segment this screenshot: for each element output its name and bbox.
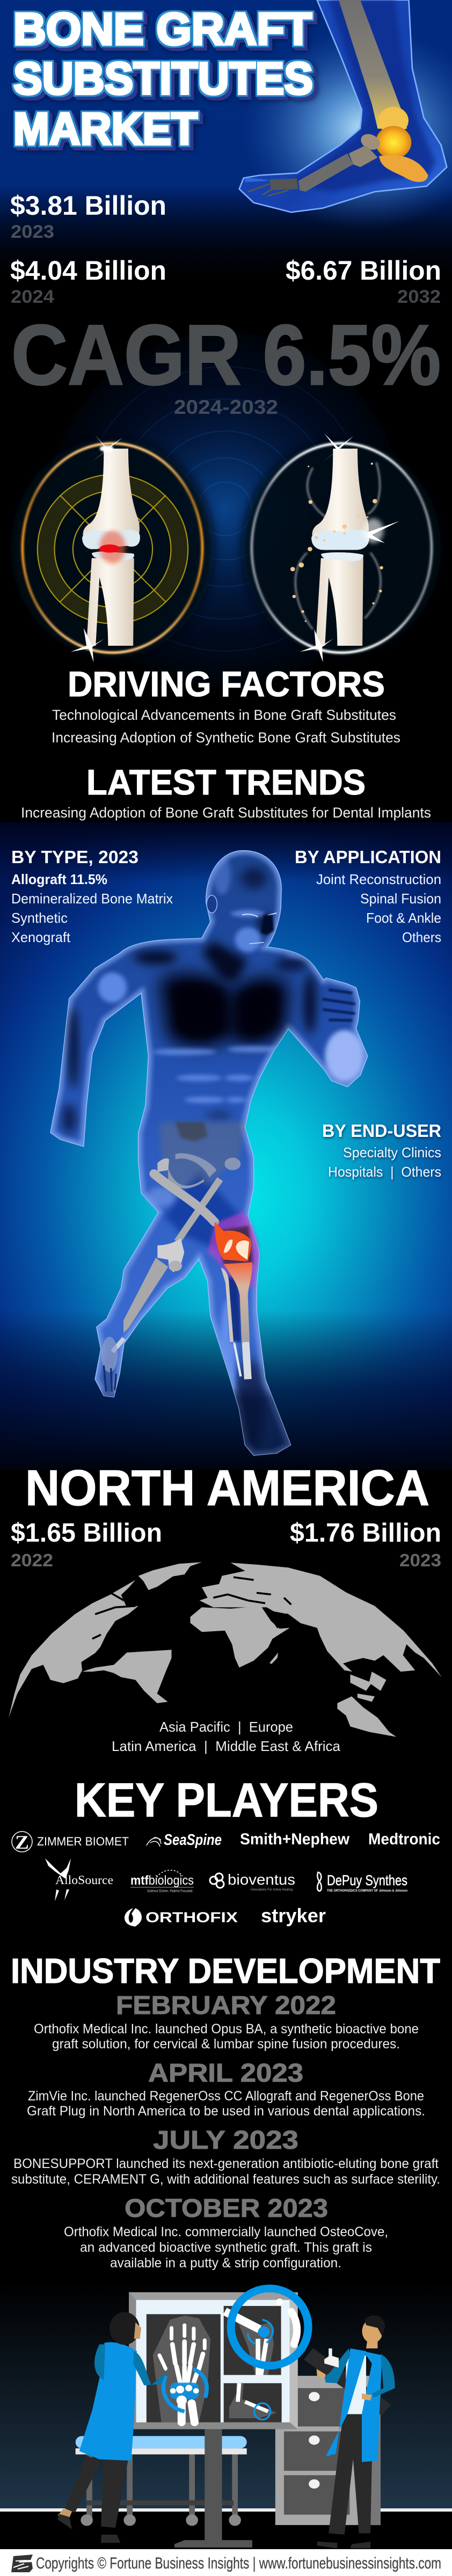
magnifier — [231, 2288, 387, 2410]
by application: BY APPLICATION — [295, 847, 441, 867]
logos: key players — [12, 1830, 440, 1926]
logo: orthofix — [125, 1908, 238, 1926]
heading: key players: KEY PLAYERS — [75, 1773, 378, 1827]
development: february 2022: FEBRUARY 2022 — [116, 1991, 336, 2020]
regions list — [112, 1719, 341, 1754]
title: SUBSTITUTES — [13, 53, 313, 104]
development: february 2022 — [34, 1991, 419, 2052]
foot glow — [242, 27, 452, 231]
logo: medtronic: Medtronic — [368, 1830, 440, 1848]
development: october 2023: Orthofix Medical Inc. commercially launched OsteoCove, — [64, 2224, 388, 2239]
value: north america 2023 — [290, 1519, 441, 1570]
board stand — [174, 2429, 252, 2548]
heading: latest trends: LATEST TRENDS — [86, 762, 366, 802]
woman doctor — [57, 2312, 169, 2543]
femur and tibia — [83, 449, 140, 646]
development: april 2023 — [27, 2059, 425, 2119]
value: north america 2022 — [11, 1519, 162, 1570]
logo: depuy synthes: THE ORTHOPAEDICS COMPANY OF Johnson & Johnson — [327, 1889, 407, 1893]
by end-user — [322, 1121, 441, 1180]
development: april 2023: ZimVie Inc. launched RegenerOss CC Allograft and RegenerOss Bone — [28, 2089, 424, 2104]
logo: seaspine: SeaSpine — [164, 1831, 222, 1849]
panel: concentric glow — [48, 332, 402, 686]
development: october 2023 — [64, 2194, 388, 2271]
regions list: Asia Pacific | Europe — [159, 1719, 293, 1735]
illustration: injured knee — [11, 435, 214, 662]
by application: Joint Reconstruction — [316, 871, 441, 887]
by type: Synthetic — [11, 910, 68, 926]
development: july 2023: substitute, CERAMENT G, with additional features such as surface sterility. — [11, 2172, 440, 2187]
by type: BY TYPE, 2023 — [11, 847, 138, 867]
by end-user: Specialty Clinics — [343, 1144, 441, 1161]
by application: Foot & Ankle — [366, 910, 441, 926]
x-ray board — [129, 2292, 298, 2429]
logo: bioventus — [210, 1871, 295, 1892]
world map — [9, 1562, 442, 1737]
chest shadow — [160, 974, 288, 1047]
logo: bioventus: Innovations For Active Healing — [251, 1888, 293, 1892]
target rings — [38, 475, 188, 624]
value: north america 2023: 2023 — [399, 1550, 441, 1570]
hand details — [322, 990, 355, 1020]
illustration: foot skeleton — [239, 0, 447, 212]
lower leg bones — [234, 1342, 240, 1376]
value: 2024: 2024 — [11, 287, 54, 307]
left knee — [157, 1238, 184, 1272]
exam table — [76, 2436, 247, 2526]
panel: segmentation — [0, 822, 452, 1470]
value: 2032: $6.67 Billion — [286, 256, 441, 286]
inflamed knee — [208, 1212, 259, 1288]
pelvis — [159, 1122, 245, 1189]
value: north america 2022: 2022 — [11, 1550, 53, 1570]
logo: mtf biologics: mtfbiologics — [130, 1873, 194, 1888]
development: october 2023: an advanced bioactive synthetic graft. This graft is — [80, 2240, 372, 2255]
value: 2024 — [10, 256, 166, 307]
thigh bones and knee — [123, 1122, 259, 1342]
development: october 2023: available in a putty & strip configuration. — [110, 2256, 341, 2271]
heading: industry development: INDUSTRY DEVELOPMENT — [11, 1951, 440, 1990]
logo: mtf biologics — [130, 1870, 194, 1893]
driving factor 1: Technological Advancements in Bone Graft Substitutes — [52, 707, 396, 723]
development: april 2023: APRIL 2023 — [148, 2059, 303, 2088]
value: 2023 — [10, 191, 166, 242]
by application: Others — [402, 929, 441, 945]
logo: fortune business insights — [11, 2555, 33, 2572]
development: february 2022: Orthofix Medical Inc. launched Opus BA, a synthetic bioactive bone — [34, 2022, 419, 2037]
development: july 2023: BONESUPPORT launched its next-generation antibiotic-eluting bone graft — [13, 2156, 439, 2171]
value: 2023: 2023 — [11, 222, 54, 242]
title — [13, 4, 313, 154]
logo: smith and nephew: Smith+Nephew — [240, 1830, 350, 1848]
by application: Spinal Fusion — [360, 891, 441, 907]
development: february 2022: graft solution, for cervical & lumbar spine fusion procedures. — [52, 2037, 400, 2052]
by end-user: Hospitals | Others — [328, 1164, 441, 1180]
by type: Allograft 11.5% — [11, 871, 107, 887]
by application — [295, 847, 441, 945]
value: north america 2023: $1.76 Billion — [290, 1519, 441, 1548]
logo: depuy synthes: DePuy Synthes — [327, 1872, 407, 1888]
by type: Demineralized Bone Matrix — [11, 891, 173, 907]
logo: depuy synthes — [317, 1872, 407, 1893]
value: 2032 — [286, 256, 441, 307]
driving factor 2: Increasing Adoption of Synthetic Bone Graft Substitutes — [52, 729, 400, 746]
cabinet — [275, 2376, 381, 2525]
logo: zimmer biomet: ZIMMER BIOMET — [37, 1835, 129, 1848]
development: july 2023 — [11, 2126, 440, 2187]
logo: seaspine — [147, 1831, 222, 1849]
logo: bioventus: bioventus — [228, 1871, 295, 1888]
by type — [11, 847, 173, 945]
value: north america 2022: $1.65 Billion — [11, 1519, 162, 1548]
heading: north america: NORTH AMERICA — [25, 1460, 429, 1516]
logo: orthofix: ORTHOFIX — [145, 1909, 238, 1925]
logo: mtf biologics: Science Driven. Patient Focused. — [147, 1889, 193, 1893]
illustration: running man — [50, 851, 368, 1464]
logo: zimmer biomet — [12, 1831, 129, 1853]
title: MARKET — [13, 104, 198, 154]
value: 2032: 2032 — [397, 287, 441, 307]
panel: market header — [0, 0, 452, 307]
footer — [0, 2549, 452, 2576]
rim light — [50, 851, 368, 1455]
regions list: Latin America | Middle East & Africa — [112, 1738, 341, 1754]
logo: allosource: AlloSource — [55, 1873, 113, 1887]
latest trend text: Increasing Adoption of Bone Graft Substitutes for Dental Implants — [21, 805, 431, 821]
logo: allosource — [45, 1858, 113, 1901]
femurs — [177, 1179, 220, 1242]
man doctor — [317, 2315, 395, 2548]
value: 2023: $3.81 Billion — [10, 191, 166, 221]
title: BONE GRAFT — [13, 4, 312, 54]
by end-user: BY END-USER — [322, 1121, 441, 1141]
logo: zimmer biomet: Z — [15, 1831, 29, 1853]
by type: Xenograft — [11, 929, 71, 945]
development: july 2023: JULY 2023 — [153, 2126, 298, 2155]
heading: driving factors: DRIVING FACTORS — [68, 664, 385, 704]
development: april 2023: Graft Plug in North America to be used in various dental applications. — [27, 2104, 425, 2119]
value: 2024: $4.04 Billion — [10, 256, 166, 286]
head details — [207, 895, 277, 944]
logo: stryker: stryker — [261, 1904, 326, 1926]
CAGR period: 2024-2032 — [174, 396, 278, 418]
illustration: healed knee — [242, 434, 441, 662]
development: october 2023: OCTOBER 2023 — [125, 2194, 328, 2223]
illustration: doctors examining x-rays — [0, 2281, 452, 2548]
